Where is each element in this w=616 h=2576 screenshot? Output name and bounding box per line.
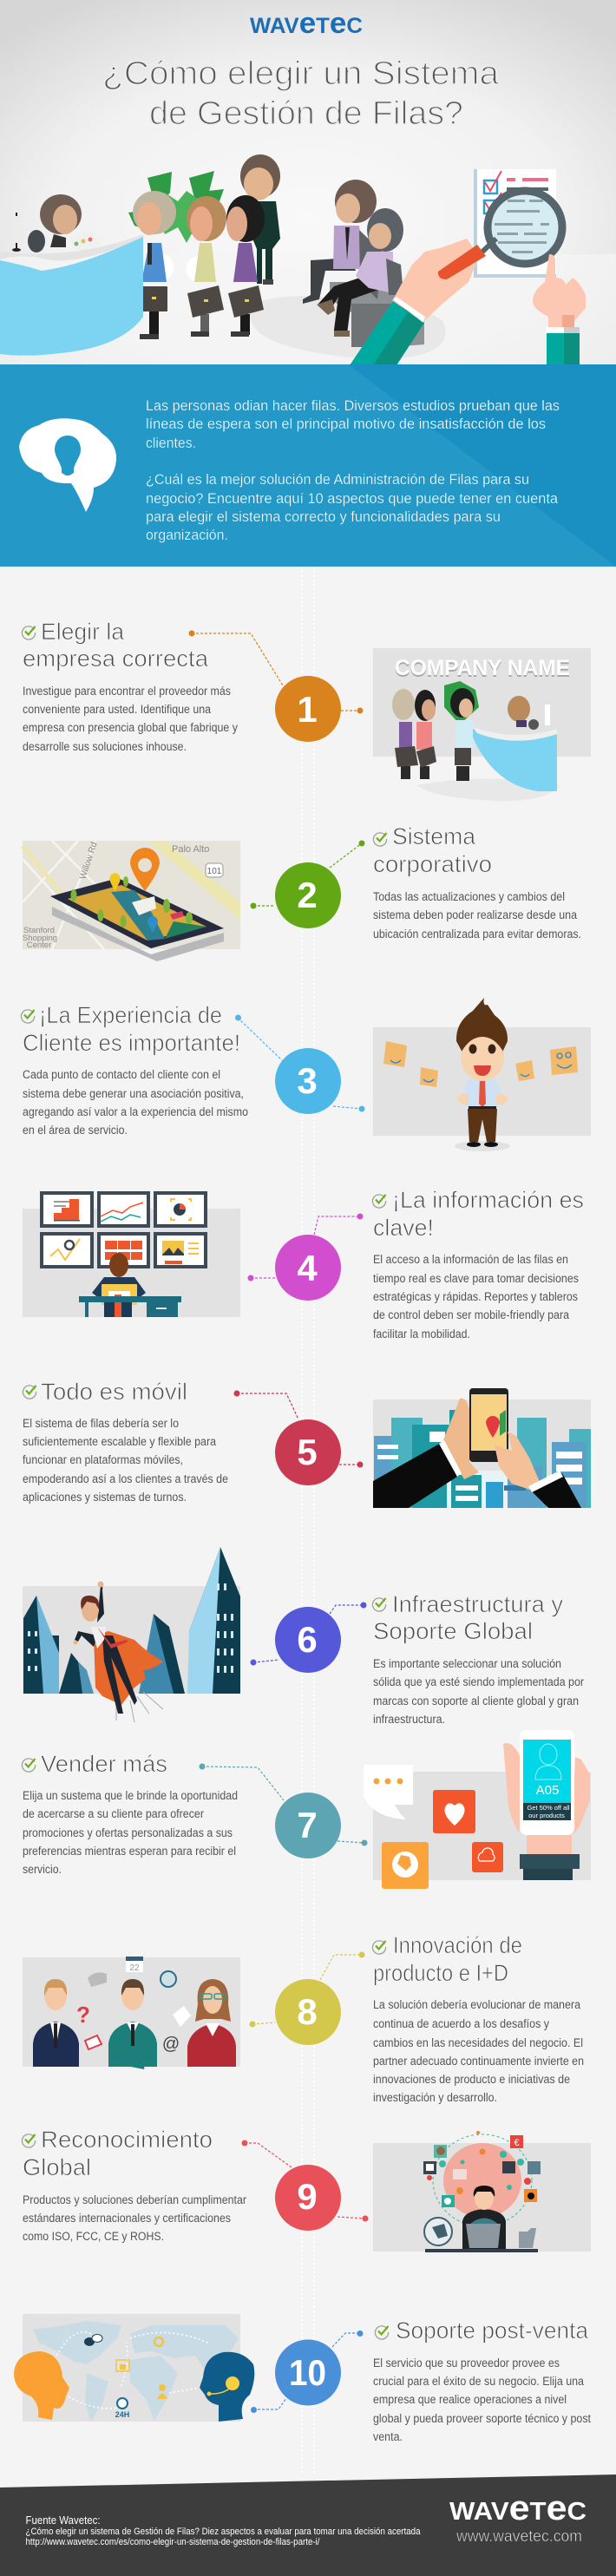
illustration: waiting room [0,154,586,365]
number circle [275,2165,341,2231]
body text: funcionar en plataformas móviles, [23,1453,183,1466]
connector [250,1602,366,1666]
panel: intro band [0,364,616,567]
intro text: para elegir el sistema correcto y funcionalidades para su [146,508,501,525]
number circle [275,1048,341,1114]
source text: http://www.wavetec.com/es/como-elegir-un-sistema-de-gestion-de-filas-parte-i/ [26,2537,320,2547]
connector [241,2140,368,2221]
seated person one [303,180,382,304]
body text: continua de acuerdo a los desafíos y [373,2017,549,2030]
body text: El acceso a la información de las filas en [373,1253,568,1266]
number circle [275,1419,341,1485]
body text: venta. [373,2430,403,2443]
body text: El servicio que su proveedor provee es [373,2356,560,2370]
left hand and handle [350,239,486,365]
number circle [275,1793,341,1858]
connector [235,1015,364,1112]
intro text: líneas de espera son el principal motivo de insatisfacción de los [146,416,546,432]
illustration: team and icons [23,1957,240,2069]
heading [373,1591,564,1644]
source text: ¿Cómo elegir un sistema de Gestión de Filas? Diez aspectos a evaluar para tomar una decisión acertada [26,2527,421,2537]
body text: servicio. [23,1863,62,1876]
illustration: phone on map: Palo Alto [172,844,209,855]
heading [373,1187,584,1241]
illustration: mobile offers: A05 [536,1783,559,1798]
heading: Soporte post-venta [396,2317,589,2343]
body text: crucial para el éxito de su negocio. Elija una [373,2375,584,2388]
heading: Infraestructura y [392,1591,564,1617]
body text: empresa con presencia global que fabrique y [23,721,238,734]
illustration: mobile offers: our products [528,1812,565,1819]
illustration: flying superhero [23,1547,240,1722]
illustration: team and icons: @ [162,2035,180,2054]
check icon [22,626,36,639]
illustration: dashboard wall [23,1193,240,1317]
body text: desarrolle sus soluciones inhouse. [23,740,187,753]
body text [23,1068,248,1137]
body text: Elija un sustema que le brinde la oportunidad [23,1789,238,1802]
number circle: 2 [297,875,318,915]
number circle: 10 [289,2352,326,2393]
heading [23,1002,240,1056]
heading: clave! [373,1215,434,1241]
body text: empoderando así a los clientes a través de [23,1472,228,1485]
icon: idea speech bubble [19,418,116,512]
number circle: 6 [297,1619,318,1660]
panel: header [0,0,616,365]
magnifying glass [482,191,562,264]
body text [373,1657,584,1726]
check icon [23,1386,36,1399]
panel: item 8 [23,1932,584,2104]
illustration: mobile offers: Get 50% off all [527,1804,570,1812]
body text: de control deben ser mobile-friendly para [373,1308,569,1321]
timeline dotted lines [302,567,314,2475]
body text: promociones y ofertas personalizadas a sus [23,1826,233,1839]
heading: Sistema [392,823,476,849]
number circle [275,1607,341,1673]
connector [250,840,364,909]
illustration: reception queue: COMPANY NAME [395,656,570,680]
body text [373,2356,591,2443]
illustration: global support: 24H [115,2410,129,2419]
body text: estratégicas y rápidas. Reportes y tableros [373,1290,578,1303]
body text: infraestructura. [373,1713,445,1726]
heading: Vender más [41,1751,167,1777]
body text: La solución debería evolucionar de manera [373,1998,580,2011]
illustration: phone on map: Stanford [23,926,55,935]
body text: El sistema de filas debería ser lo [23,1417,179,1430]
heading [373,823,492,877]
check icon [375,2326,389,2339]
heading [373,1932,522,1986]
panel: item 4 [23,1187,584,1340]
heading: producto e I+D [373,1960,508,1986]
body text: partner adecuado continuamente invierte en [373,2055,584,2068]
body text: suficientemente escalable y flexible para [23,1435,216,1448]
number circle: 3 [297,1060,318,1101]
body text: conveniente para usted. Identifique una [23,703,211,716]
illustration: phone on map: Willow Rd [78,841,100,881]
body text: cambios en las necesidades del negocio. El [373,2036,583,2049]
check icon [22,1759,36,1772]
panel: item 1 [22,619,591,801]
intro text: clientes. [146,435,196,451]
body text [373,890,581,941]
heading: Cliente es importante! [23,1030,240,1056]
chairs [330,282,424,347]
connector [250,1952,364,2027]
panel: item 3 [21,998,591,1151]
body text: como ISO, FCC, CE y ROHS. [23,2230,164,2243]
heading: ¡La información es [392,1187,584,1213]
panel: item 7 [22,1730,591,1889]
number circle: 7 [297,1805,318,1845]
body text [373,1253,579,1340]
body text [23,2193,246,2243]
heading [23,2127,213,2180]
body text: en el área de servicio. [23,1124,128,1137]
heading [23,619,209,672]
man with blue shirt [133,191,176,339]
reception desk [0,194,143,356]
number circle: 1 [297,689,318,730]
body text: innovaciones de producto e iniciativas de [373,2073,570,2086]
body text: Productos y soluciones deberían cumplimentar [23,2193,246,2206]
body text: tiempo real es clave para tomar decisiones [373,1272,579,1285]
panel: item 9 [22,2127,591,2252]
illustration: reception queue [373,648,591,801]
connector [234,1390,363,1468]
website: www.wavetec.com [455,2527,582,2545]
body text: aplicaciones y sistemas de turnos. [23,1491,187,1504]
body text: facilitar la mobilidad. [373,1327,470,1340]
connector [248,1213,363,1281]
illustration: phone on map: Shopping [23,934,57,943]
title: ¿Cómo elegir un Sistema [102,56,500,92]
intro text: organización. [146,527,228,543]
heading: Soporte Global [373,1618,533,1644]
checklist [474,169,556,278]
planters [156,255,174,279]
body text: estándares internacionales y certificaciones [23,2212,231,2225]
panel: footer [0,2474,616,2576]
body text [23,1417,228,1504]
body text [23,1789,238,1876]
illustration: phone map in city [373,1388,591,1508]
plants [128,171,224,243]
body text: global y pueda proveer soporte técnico y post [373,2412,591,2425]
check icon [372,1195,386,1208]
intro text: negocio? Encuentre aquí 10 aspectos que puede tener en cuenta [146,490,559,507]
title: de Gestión de Filas? [149,95,463,132]
number circle [275,1979,341,2045]
illustration: phone on map: 101 [207,867,222,876]
body text: Todas las actualizaciones y cambios del [373,890,565,903]
illustration: mobile offers [364,1730,591,1889]
illustration: team and icons: ? [76,2002,90,2028]
panel: item 6 [23,1547,584,1726]
check icon [21,1010,35,1023]
body text: empresa que realice operaciones a nivel [373,2393,567,2406]
heading: Global [23,2154,91,2180]
body text: investigación y desarrollo. [373,2091,497,2104]
logo: WAVeTeC [250,7,363,40]
check icon [372,1598,386,1611]
number circle: 9 [297,2176,318,2217]
intro text: Las personas odian hacer filas. Diversos estudios prueban que las [146,397,560,414]
heading: corporativo [373,851,492,877]
illustration: global support [14,2314,254,2422]
illustration: phone on map: Center [27,941,51,950]
number circle [275,862,341,928]
source text [26,2514,421,2547]
body text: preferencias mientras esperan para recibir el [23,1845,236,1858]
title [102,56,500,132]
illustration: manager with finance icons [373,2131,591,2252]
body text: Cada punto de contacto del cliente con el [23,1068,220,1081]
intro text: ¿Cuál es la mejor solución de Administración de Filas para su [146,471,529,488]
illustration: phone on map [23,841,240,961]
number circle: 8 [297,1991,318,2032]
body text: agregando así valor a la experiencia del mismo [23,1105,248,1118]
illustration: team and icons: 22 [129,1963,140,1973]
connector [200,1763,368,1846]
source text: Fuente Wavetec: [26,2514,101,2527]
number circle [275,1235,341,1301]
intro text [146,397,560,543]
check icon [22,2134,36,2147]
heading: Todo es móvil [41,1379,187,1405]
man with purple shirt [226,195,265,337]
number circle [275,676,341,742]
body text: sistema deben poder realizarse desde una [373,908,577,921]
check icon [372,1941,386,1954]
connector [189,630,363,713]
number circle: 4 [297,1248,318,1288]
right hand [533,254,586,365]
body text: Es importante seleccionar una solución [373,1657,561,1670]
heading: Innovación de [393,1932,522,1958]
body text: ubicación centralizada para evitar demoras. [373,927,581,941]
standing man at back [240,154,280,285]
body text: marcas con soporte al cliente global y gran [373,1694,579,1708]
heading: ¡La Experiencia de [39,1002,222,1028]
body text [373,1998,584,2104]
panel: item 5 [23,1379,591,1508]
connector [251,2330,363,2413]
heading: Elegir la [41,619,125,645]
man with yellow shirt [187,196,226,337]
heading: Reconocimiento [41,2127,213,2153]
number circle: 5 [297,1432,318,1472]
body text [23,685,238,753]
footer logo: WAVeTeC [449,2489,587,2527]
body text: sistema debe generar una asociación positiva, [23,1087,244,1100]
body text: sólida que ya esté siendo implementada por [373,1675,584,1688]
illustration: happy man [373,998,591,1151]
panel: item 2 [23,823,581,961]
check icon [373,833,387,846]
body text: de acercarse a su cliente para ofrecer [23,1807,204,1820]
heading: empresa correcta [23,646,209,672]
panel: item 10 [14,2314,591,2443]
number circle [275,2339,341,2405]
seated person two [317,208,403,337]
illustration: manager with finance icons: € [514,2138,520,2148]
body text: Investigue para encontrar el proveedor más [23,685,231,698]
